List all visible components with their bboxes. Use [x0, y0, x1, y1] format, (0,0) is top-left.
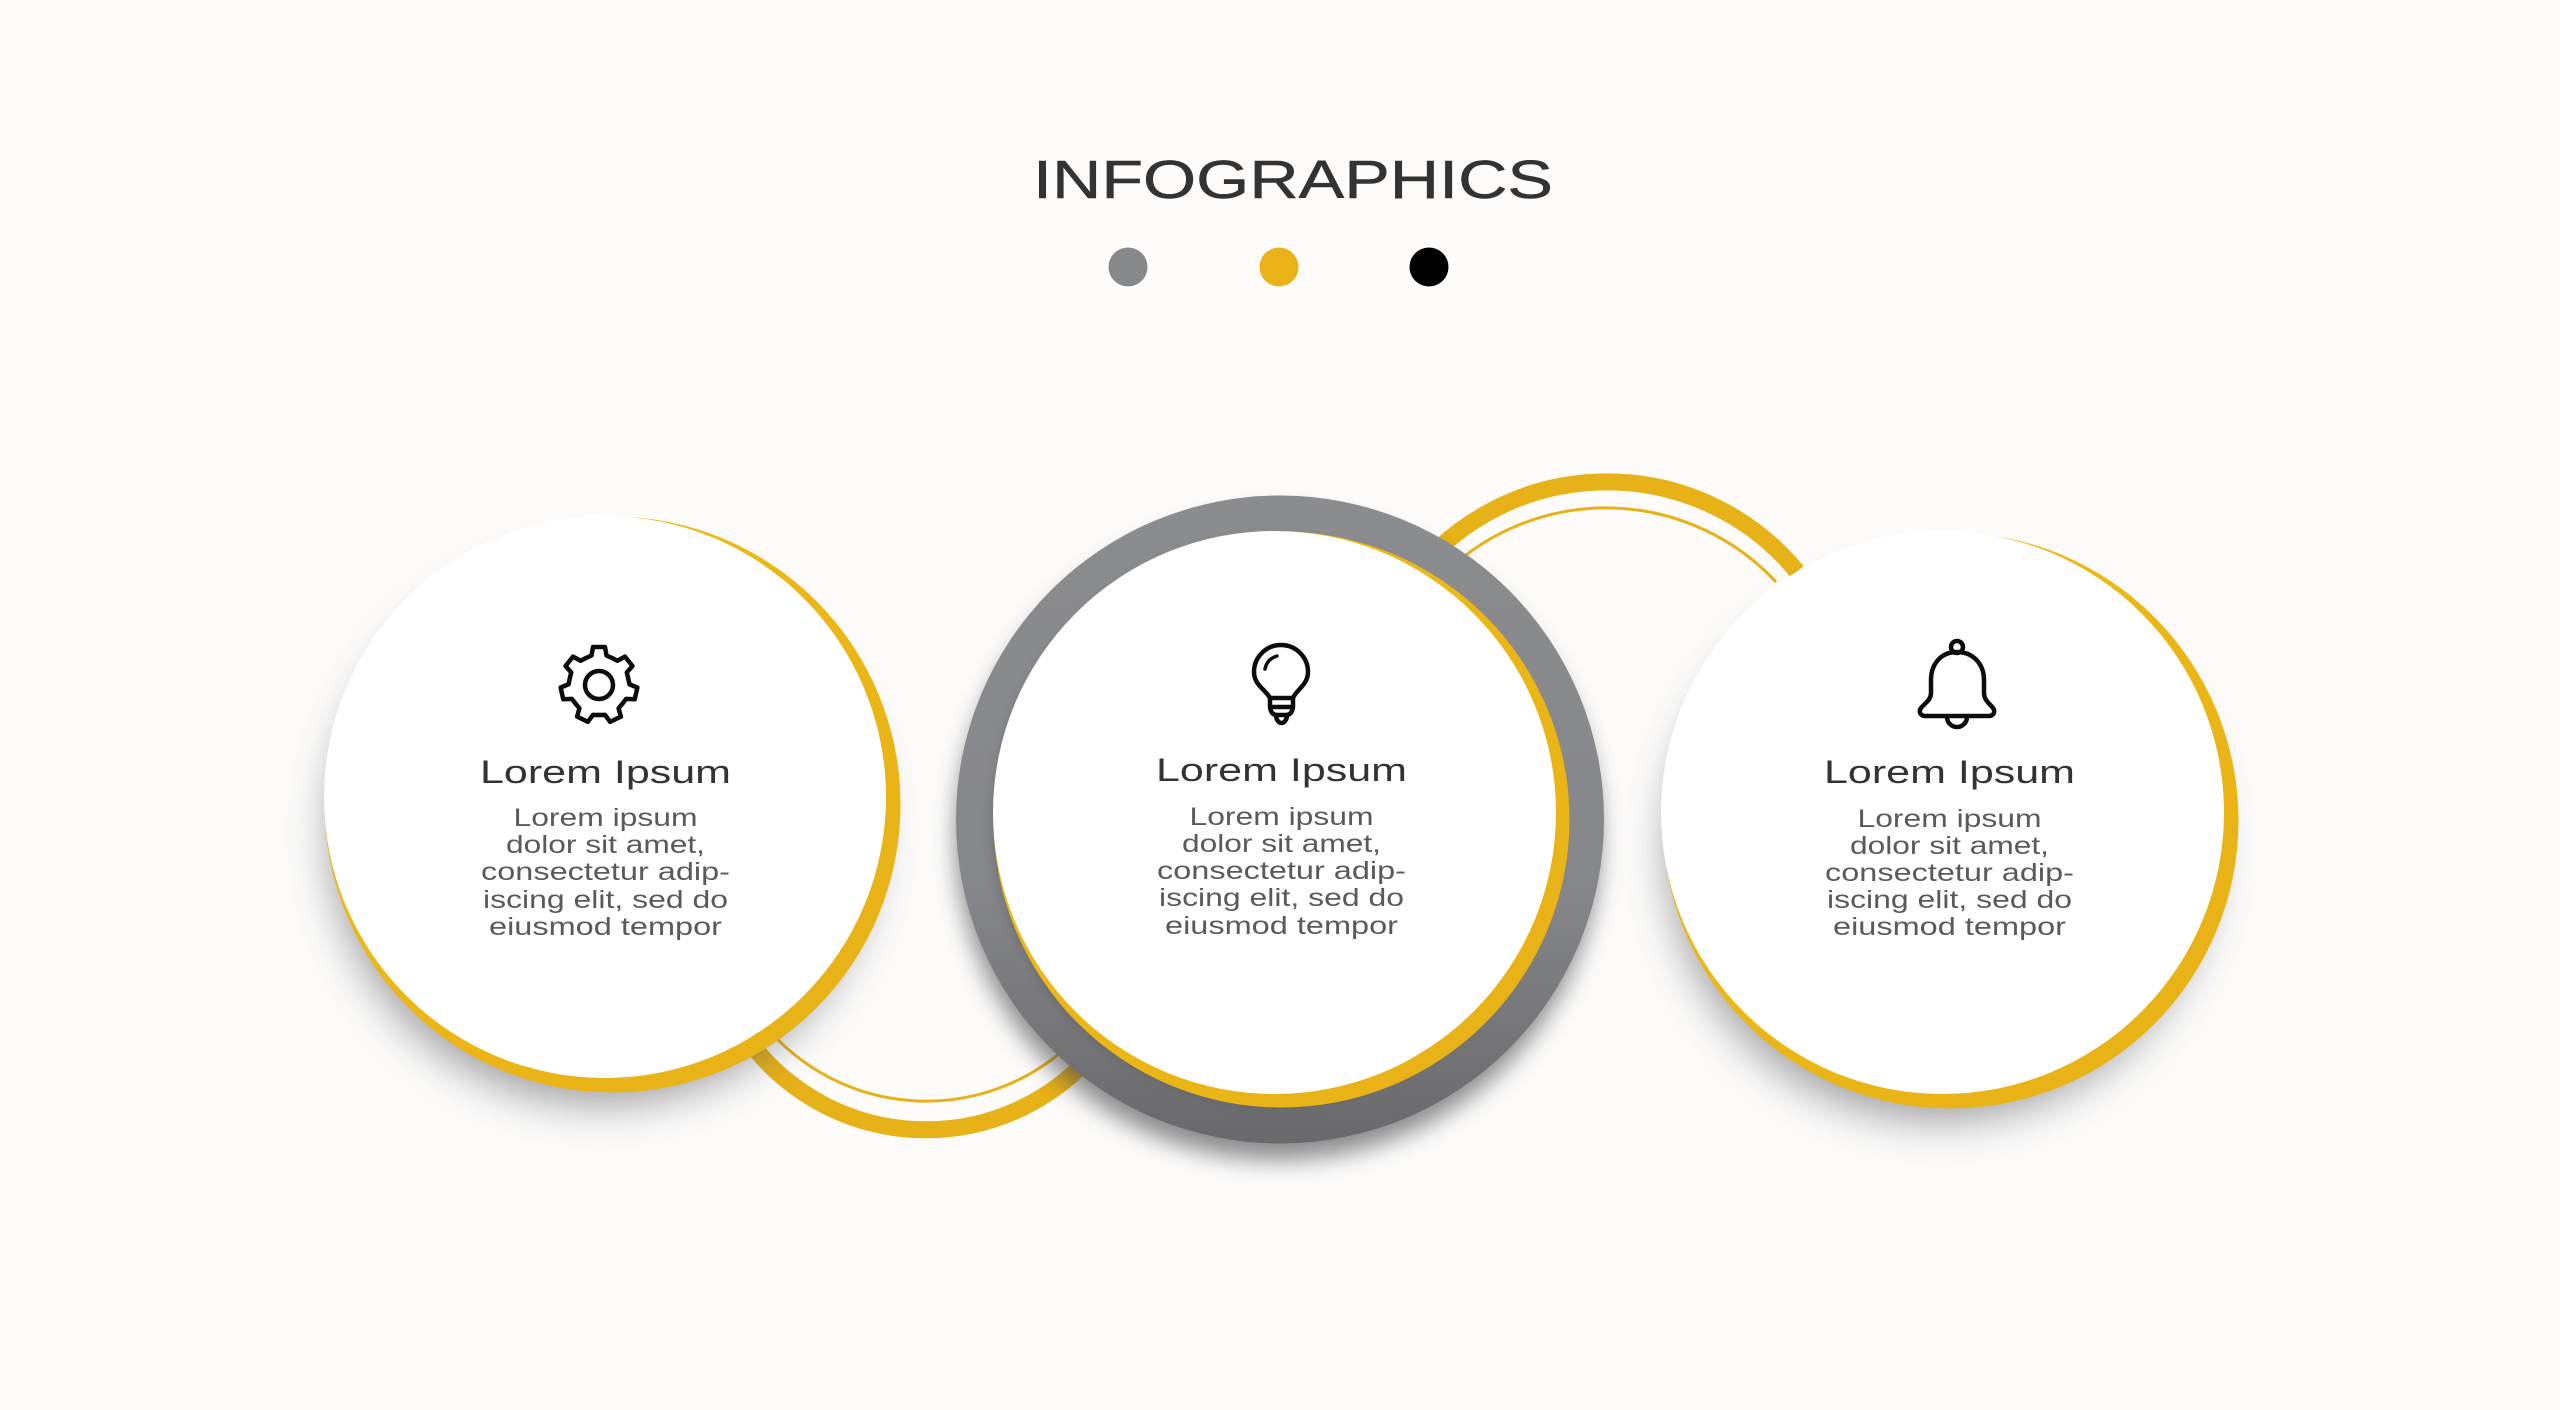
heading: right: Lorem Ipsum — [1824, 754, 2075, 790]
body text: right: dolor sit amet, — [1850, 832, 2049, 860]
body text: left: iscing elit, sed do — [483, 886, 728, 914]
body text: center: iscing elit, sed do — [1159, 884, 1404, 912]
body text: right — [1825, 805, 2074, 941]
heading: center: Lorem Ipsum — [1156, 752, 1407, 788]
icon: bell — [1920, 641, 1994, 727]
icon: light bulb — [1254, 645, 1308, 723]
lower connector arc — [746, 1028, 1096, 1130]
body text: right: Lorem ipsum — [1858, 805, 2042, 833]
upper connector arc — [1407, 482, 1797, 585]
body text: left: dolor sit amet, — [506, 831, 705, 859]
panel: center circle — [956, 496, 1604, 1160]
legend dots — [1108, 248, 1448, 286]
body text: right: eiusmod tempor — [1833, 913, 2066, 941]
body text: right: consectetur adip- — [1825, 859, 2074, 887]
body text: left: consectetur adip- — [481, 858, 730, 886]
body text: left: eiusmod tempor — [489, 913, 722, 941]
panel: left circle — [324, 516, 900, 1104]
body text: center: Lorem ipsum — [1190, 803, 1374, 831]
body text: left: Lorem ipsum — [514, 804, 698, 832]
title: INFOGRAPHICS — [1033, 150, 1553, 210]
icon: gear — [559, 647, 639, 725]
body text: center — [1157, 803, 1406, 940]
body text: left — [481, 804, 730, 941]
body text: center: dolor sit amet, — [1182, 830, 1381, 858]
body text: center: eiusmod tempor — [1165, 912, 1398, 940]
panel: right circle — [1661, 531, 2238, 1120]
body text: right: iscing elit, sed do — [1827, 886, 2072, 914]
body text: center: consectetur adip- — [1157, 857, 1406, 885]
heading: left: Lorem Ipsum — [480, 754, 731, 790]
